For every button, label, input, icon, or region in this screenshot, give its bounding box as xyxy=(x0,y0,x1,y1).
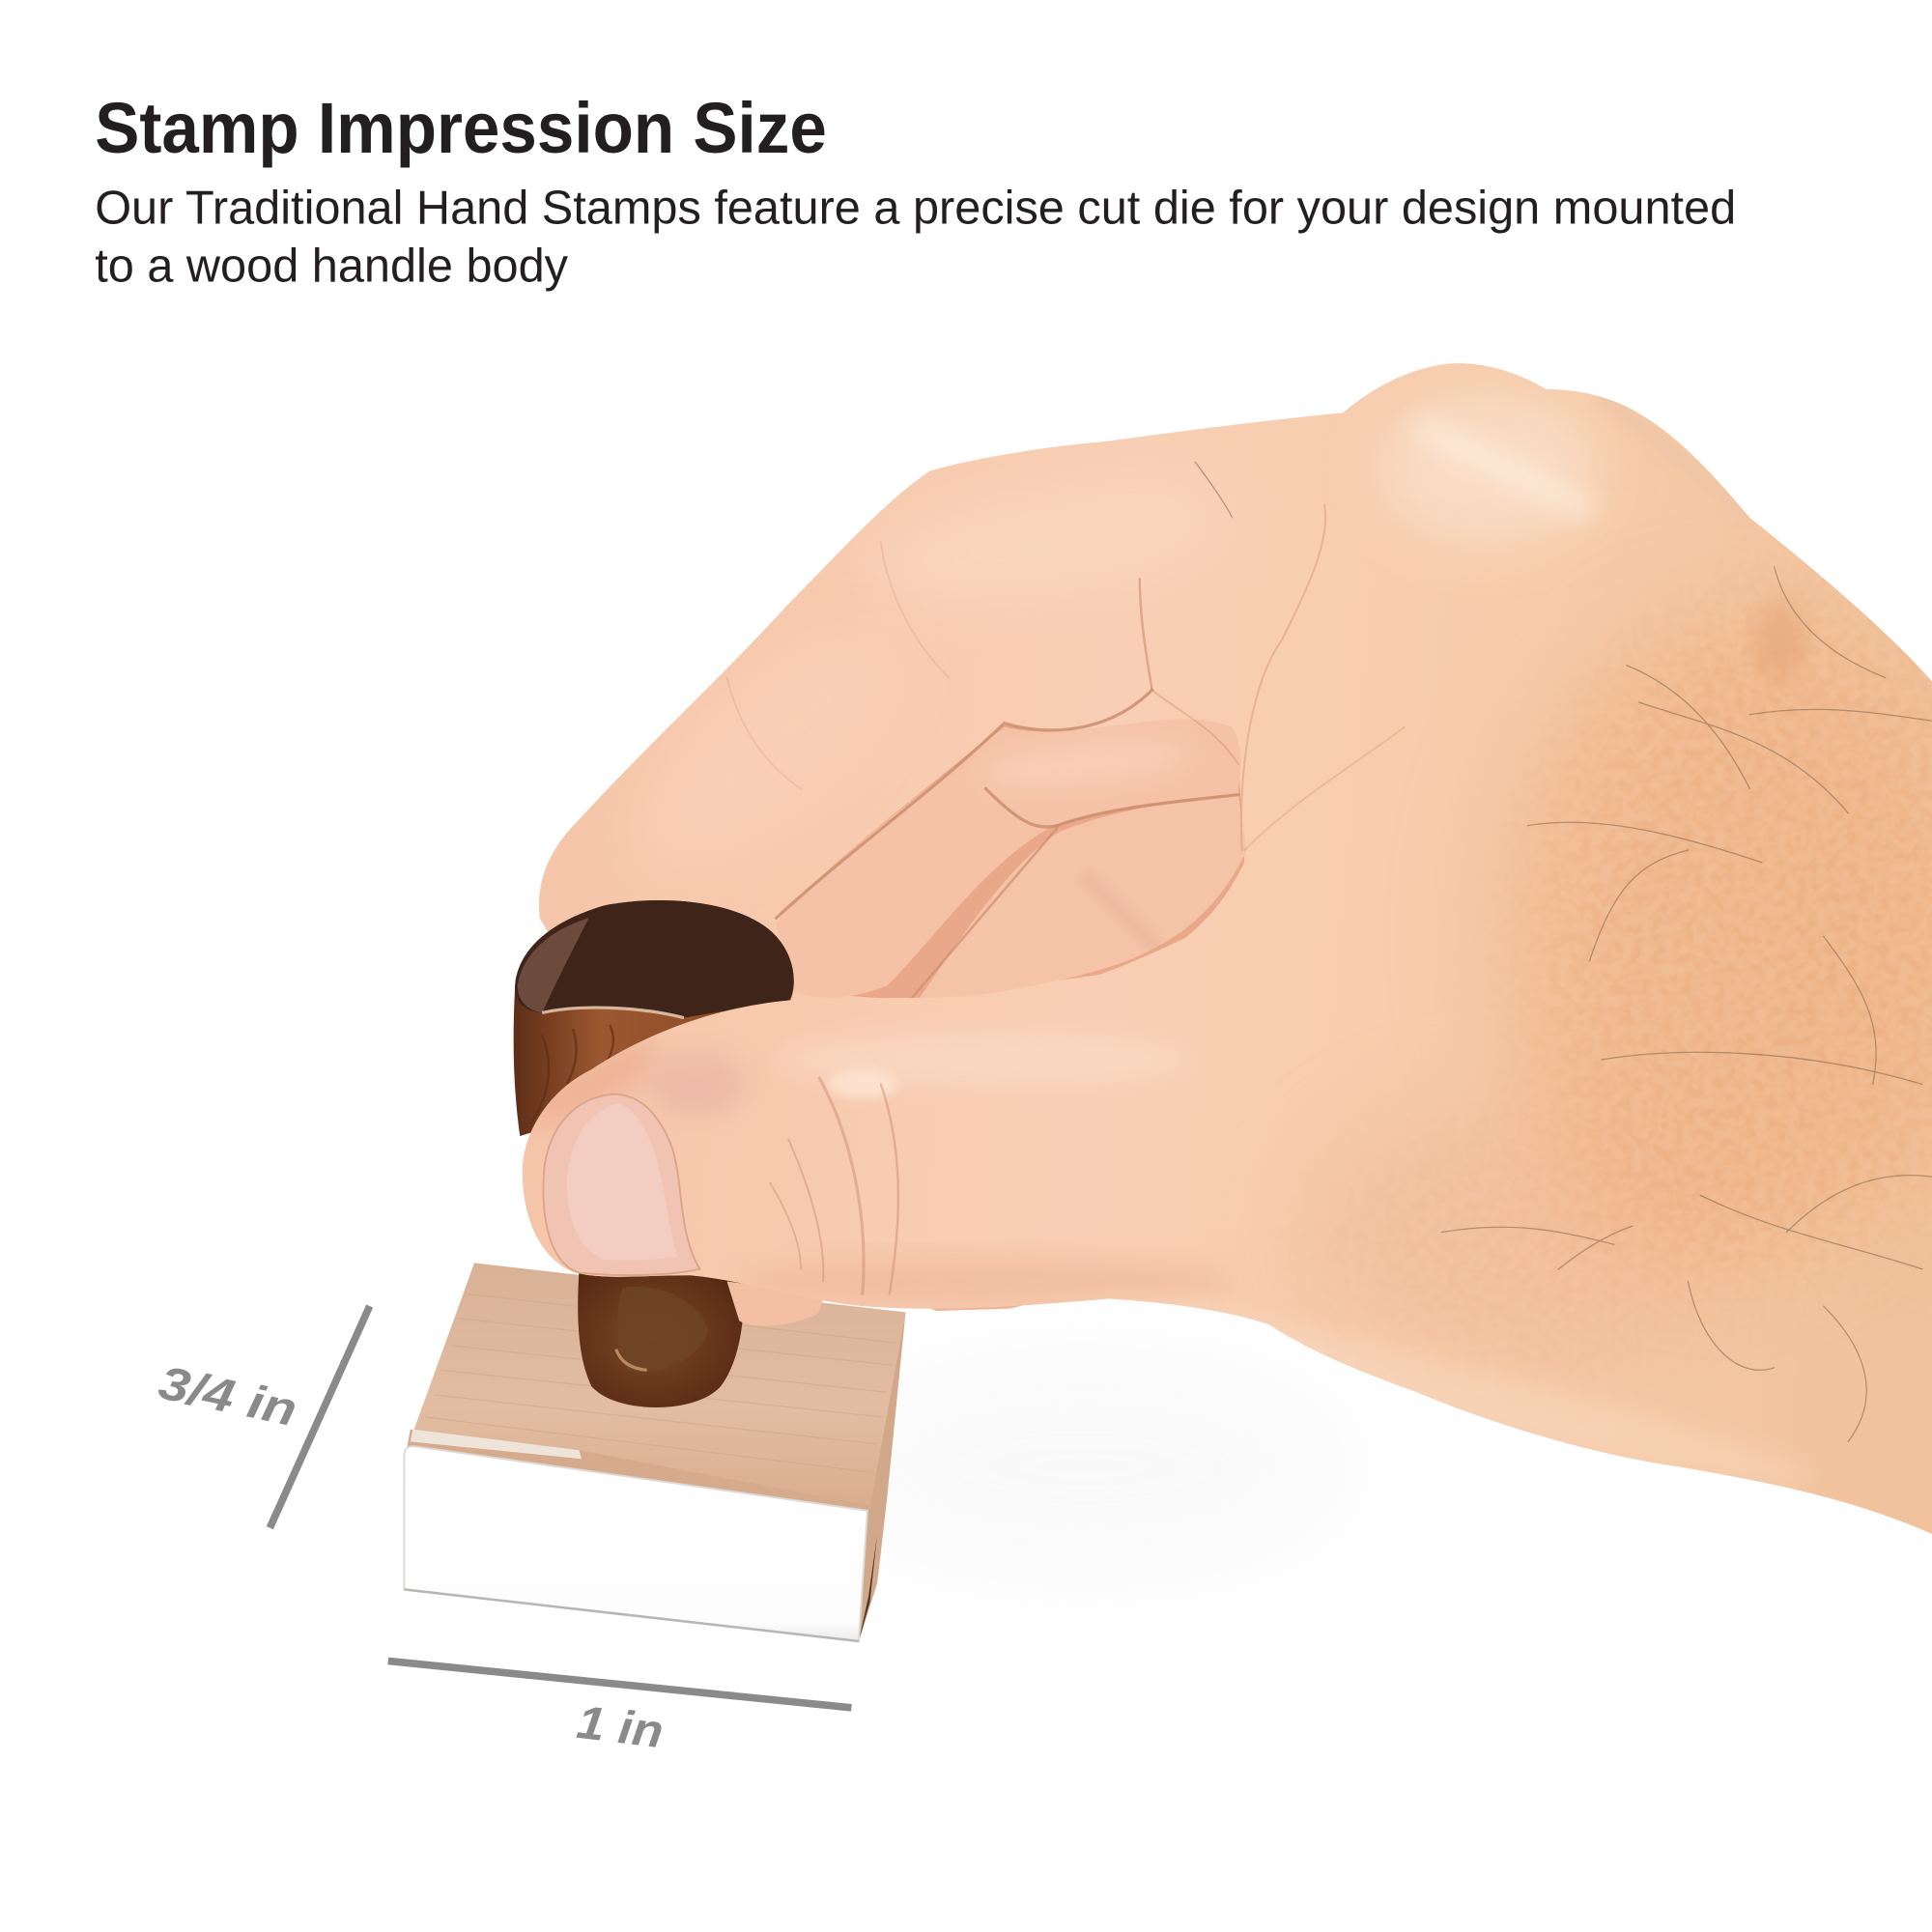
ring finger xyxy=(918,795,1247,1001)
finger under thumb xyxy=(727,1282,826,1325)
stamp handle stem xyxy=(578,1269,744,1407)
fingers in shadow xyxy=(777,724,1244,1001)
finger creases xyxy=(727,505,1405,998)
middle finger xyxy=(777,719,1240,998)
acrylic die edge xyxy=(404,1430,870,1528)
wood mount top xyxy=(412,1263,906,1508)
finger highlights xyxy=(600,455,1239,909)
white impression die xyxy=(404,1446,867,1641)
title: Stamp Impression Size xyxy=(95,88,827,168)
thumbnail xyxy=(543,1094,699,1275)
stamp base xyxy=(404,1263,906,1641)
wood mount right side xyxy=(859,1312,906,1641)
hand xyxy=(523,363,1932,1534)
description text: to a wood handle body xyxy=(95,241,569,293)
back-of-hand shading xyxy=(1294,386,1932,1485)
ground shadow xyxy=(813,1355,1355,1577)
dimension: 3/4 in xyxy=(155,1306,370,1528)
dimension: 3/4 in: 3/4 in xyxy=(155,1356,301,1436)
arm hair xyxy=(1195,462,1932,1441)
stamp knob xyxy=(514,900,794,1136)
dimension: 1 in: 1 in xyxy=(574,1696,667,1758)
dimension: 1 in xyxy=(388,1661,851,1758)
thumb xyxy=(522,939,1269,1325)
description text: Our Traditional Hand Stamps feature a precise cut die for your design mounted xyxy=(95,183,1736,235)
